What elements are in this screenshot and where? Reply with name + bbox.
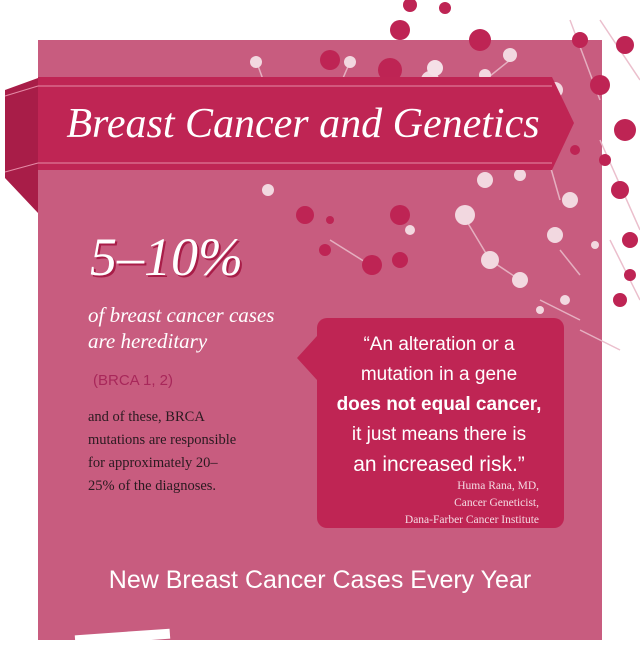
callout: quote: it just means there is <box>352 424 526 445</box>
text: description: and of these, BRCA <box>88 409 205 425</box>
callout: quote: mutation in a gene <box>361 364 517 385</box>
ribbon banner <box>4 77 574 213</box>
text: description: 25% of the diagnoses. <box>88 478 216 494</box>
callout: quote: “An alteration or a <box>363 334 515 355</box>
heading: new cases: New Breast Cancer Cases Every Year <box>109 566 531 594</box>
callout: quote: Dana-Farber Cancer Institute <box>405 514 539 526</box>
callout: quote: Cancer Geneticist, <box>454 497 539 509</box>
text: hereditary: of breast cancer cases <box>88 303 274 327</box>
callout: quote: Huma Rana, MD, <box>457 480 539 492</box>
callout: quote: an increased risk.” <box>353 453 525 476</box>
partial bottom elements <box>75 629 170 645</box>
callout: quote <box>317 318 564 528</box>
title: Breast Cancer and Genetics <box>66 101 540 147</box>
text: hereditary <box>88 303 274 353</box>
text: hereditary: are hereditary <box>88 329 207 353</box>
text: description: mutations are responsible <box>88 432 236 448</box>
stat: 5-10%: 5–10% <box>90 227 243 287</box>
text: description <box>88 409 236 494</box>
callout: quote: does not equal cancer, <box>337 394 541 415</box>
text: description: for approximately 20– <box>88 455 218 471</box>
text: BRCA: (BRCA 1, 2) <box>93 372 173 389</box>
